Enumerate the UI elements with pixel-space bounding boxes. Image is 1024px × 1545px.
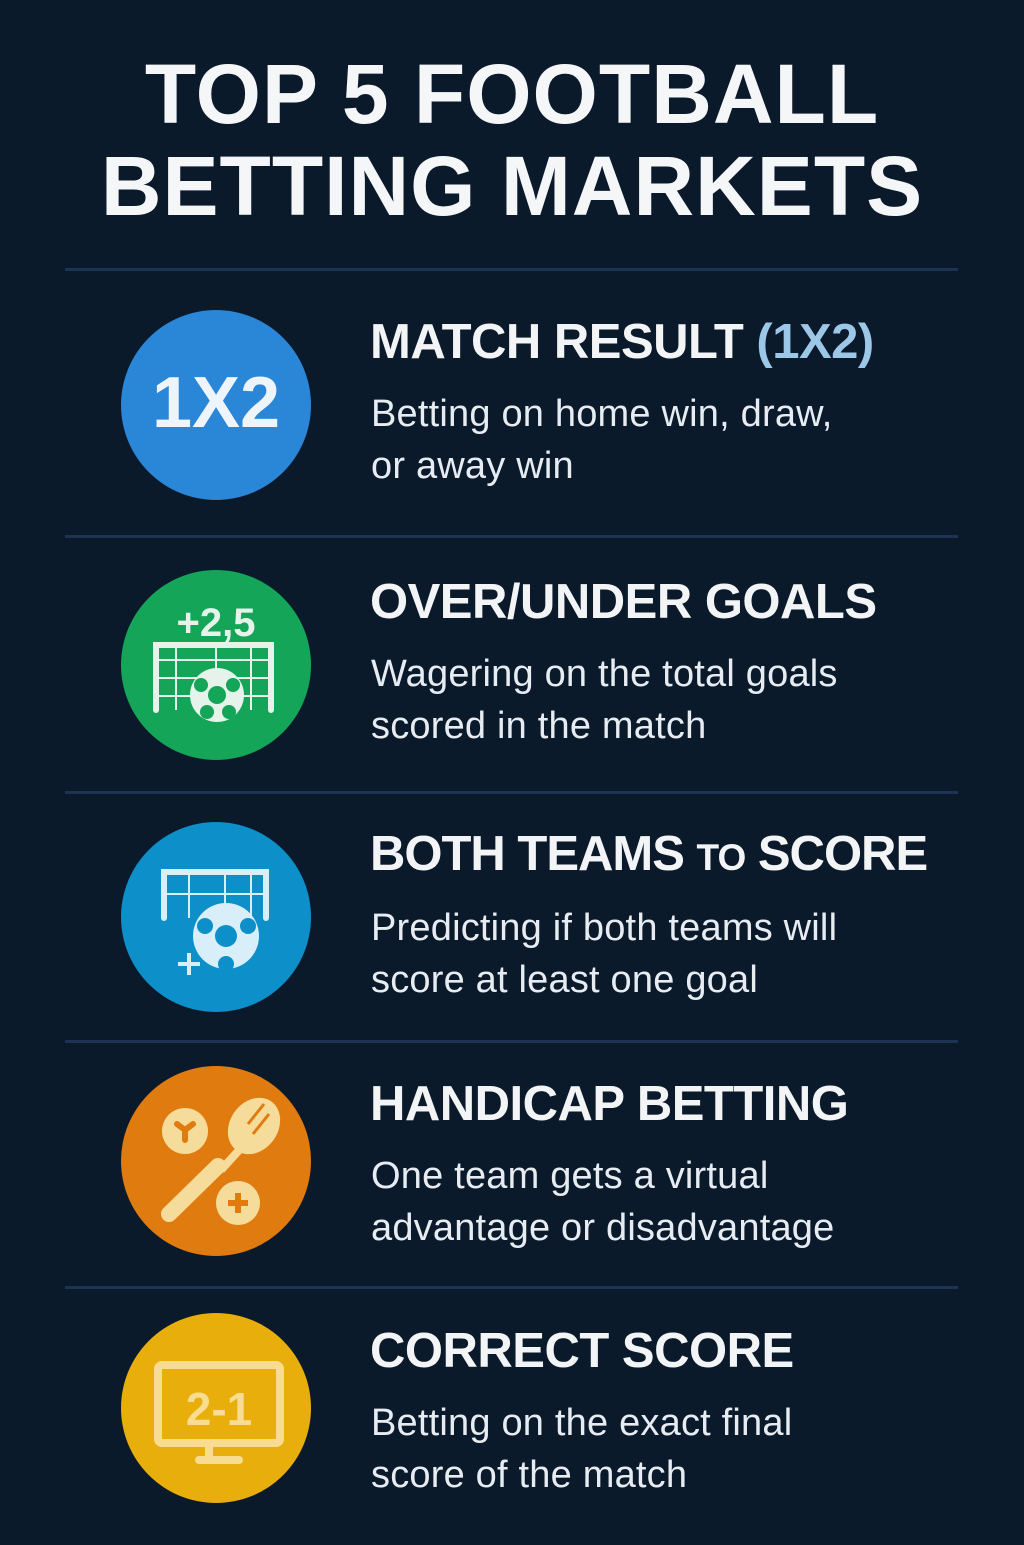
text: handicap description: advantage or disadvantage: [371, 1207, 834, 1249]
heading: match result: MATCH RESULT (1X2): [370, 315, 874, 369]
text: btts description: Predicting if both teams will: [371, 907, 837, 949]
text: correct score description: [371, 1402, 792, 1496]
icon: scoreboard 2-1: 2-1: [186, 1383, 252, 1435]
heading: both teams to score: BOTH TEAMS TO SCORE: [370, 827, 927, 881]
text: handicap description: One team gets a virtual: [371, 1155, 768, 1197]
panel: handicap: [121, 1066, 848, 1256]
title: TOP 5 FOOTBALL: [145, 47, 879, 141]
icon: scoreboard 2-1: [121, 1313, 311, 1503]
panel: both teams to score: [121, 822, 927, 1012]
text: correct score description: Betting on the exact final: [371, 1402, 792, 1444]
heading: over/under: OVER/UNDER GOALS: [370, 575, 877, 629]
title: [101, 47, 923, 233]
text: over/under description: scored in the match: [371, 705, 706, 747]
text: match result description: [371, 393, 832, 487]
panel: correct score: [121, 1313, 794, 1503]
panel: over/under: [121, 570, 877, 760]
icon: goal with ball: [121, 822, 311, 1012]
panel: match result: [121, 310, 874, 500]
title: BETTING MARKETS: [101, 139, 923, 233]
text: over/under description: Wagering on the total goals: [371, 653, 838, 695]
text: over/under description: [371, 653, 838, 747]
text: btts description: score at least one goal: [371, 959, 758, 1001]
text: correct score description: score of the match: [371, 1454, 687, 1496]
icon: goal +2,5: [121, 570, 311, 760]
text: match result description: Betting on home win, draw,: [371, 393, 832, 435]
icon: handicap tools: [121, 1066, 311, 1256]
text: match result description: or away win: [371, 445, 574, 487]
icon: 1X2: 1X2: [152, 363, 280, 443]
heading: correct score: CORRECT SCORE: [370, 1324, 794, 1378]
text: handicap description: [371, 1155, 834, 1249]
icon: goal +2,5: +2,5: [177, 601, 255, 645]
icon: 1X2: [121, 310, 311, 500]
heading: handicap: HANDICAP BETTING: [370, 1077, 848, 1131]
text: btts description: [371, 907, 837, 1001]
